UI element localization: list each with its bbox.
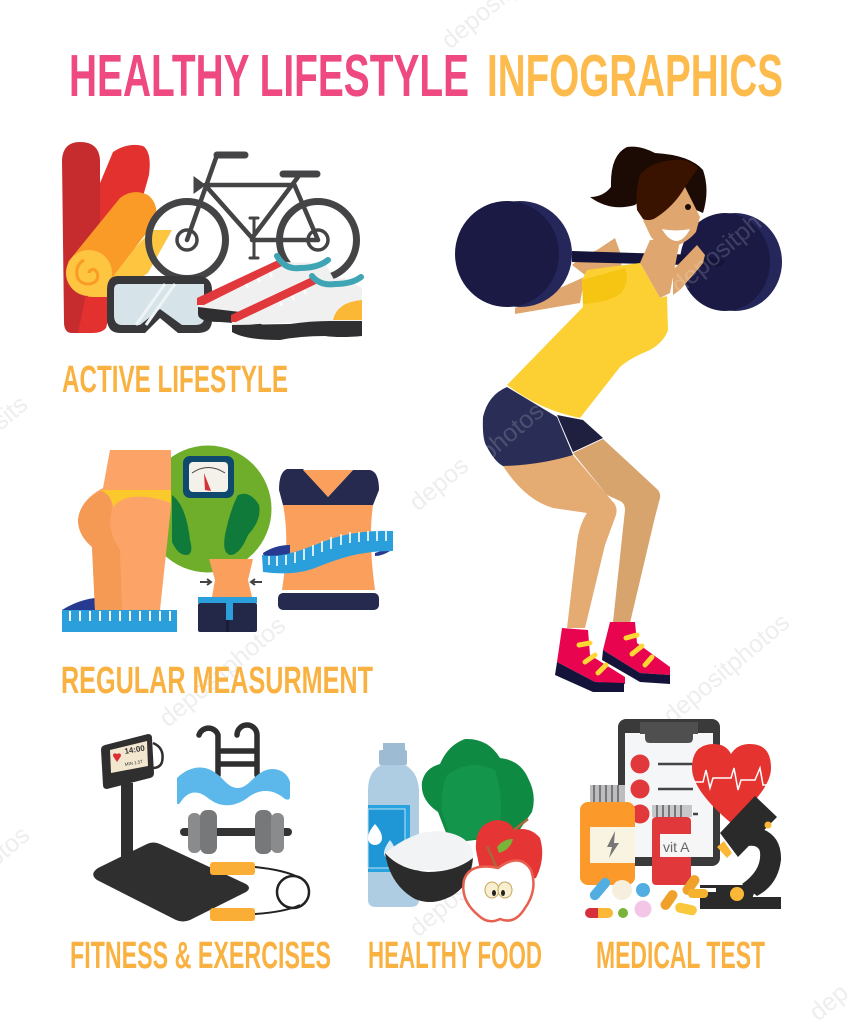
panel: healthy food	[368, 739, 542, 977]
panel: medical test	[580, 719, 781, 977]
infographic canvas: depositphotos	[666, 178, 803, 300]
tank top	[507, 263, 668, 418]
panel: regular measurement	[61, 446, 393, 702]
icon: microscope	[700, 796, 781, 909]
infographic canvas: depositphotos	[404, 821, 541, 943]
smile	[662, 229, 690, 241]
panel: active lifestyle	[62, 142, 362, 401]
back arm	[515, 238, 622, 314]
icon: lettuce	[422, 739, 534, 843]
figure: woman lifting barbell	[455, 147, 782, 692]
far hand	[673, 245, 705, 295]
icon: clipboard	[618, 719, 720, 866]
label: healthy food: HEALTHY FOOD	[368, 935, 542, 977]
sleeve shadow	[582, 268, 627, 304]
icon: treadmill	[93, 734, 249, 922]
back shoe	[602, 622, 670, 684]
icon: red vitamin bottle	[652, 805, 703, 885]
label: regular measurement: REGULAR MEASURMENT	[61, 660, 373, 702]
label: active lifestyle: ACTIVE LIFESTYLE	[62, 359, 288, 401]
neck and chest	[640, 240, 680, 298]
icon: rice bowl	[385, 831, 473, 902]
icon: assorted pills	[585, 873, 708, 918]
icon: torso with measuring tape	[262, 469, 393, 610]
infographic canvas: depos	[404, 451, 474, 517]
icon: jump rope	[210, 862, 309, 921]
infographic canvas: photos	[474, 397, 549, 467]
face	[643, 187, 700, 247]
icon: heart with pulse	[692, 744, 771, 823]
icon: hips with tape	[62, 450, 177, 632]
icon: apples	[463, 819, 542, 921]
left barbell plate	[455, 201, 572, 307]
back leg	[573, 439, 660, 623]
icon: skis	[62, 142, 150, 333]
icon: treadmill: MIN 1.57	[124, 759, 144, 767]
icon: treadmill: 14:00	[124, 743, 146, 756]
ponytail and hair	[590, 147, 706, 213]
icon: sneakers	[197, 256, 362, 340]
label: fitness and exercises: FITNESS & EXERCISES	[70, 935, 331, 977]
right barbell plate	[680, 213, 782, 311]
shorts	[483, 387, 603, 466]
fringe	[636, 160, 698, 220]
icon: green bathroom scale	[144, 446, 272, 572]
panel: fitness and exercises	[70, 725, 331, 977]
icon: red vitamin bottle: vit A	[663, 839, 690, 855]
title: HEALTHY LIFESTYLE	[69, 43, 469, 109]
icon: dumbbell	[180, 810, 292, 854]
front leg	[503, 455, 617, 628]
barbell bar	[572, 251, 725, 266]
icon: bicycle	[148, 155, 356, 278]
front shoe	[555, 628, 625, 692]
icon: goggles	[107, 276, 212, 333]
icon: orange pill bottle	[580, 785, 635, 885]
icon: slim waist with jeans	[198, 559, 262, 632]
icon: rolled mat	[66, 192, 172, 297]
infographic canvas: depositphotos	[658, 608, 795, 730]
icon: pool ladder and water	[177, 725, 290, 805]
icon: water bottle	[368, 743, 419, 907]
infographic canvas: depositphotos	[154, 611, 291, 733]
eye	[685, 204, 691, 210]
